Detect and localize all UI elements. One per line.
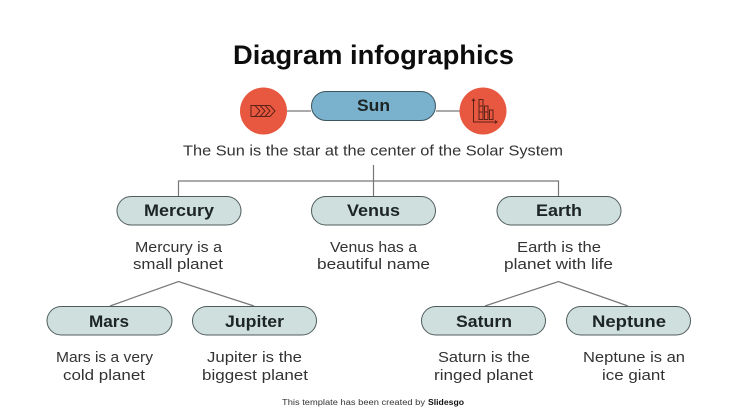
- text: Jupiter: [202, 349, 309, 384]
- pill: Venus: Venus: [347, 201, 400, 220]
- text: Neptune: [583, 349, 685, 384]
- text: Saturn: [434, 349, 534, 384]
- pill: Mercury: Mercury: [144, 201, 215, 220]
- text: Venus: Venus has a: [330, 239, 418, 256]
- pill: Earth: Earth: [536, 201, 582, 220]
- connector: Earth branch: [485, 282, 628, 306]
- footer credit: [282, 398, 464, 407]
- tree connector: [178, 165, 558, 196]
- pill: Neptune: Neptune: [592, 312, 666, 331]
- text: Jupiter: Jupiter is the: [207, 349, 302, 366]
- pill: Earth: [497, 196, 621, 225]
- pill: Saturn: [422, 306, 546, 335]
- pill: Jupiter: [192, 306, 316, 335]
- text: Jupiter: biggest planet: [202, 367, 309, 384]
- text: Earth: Earth is the: [517, 239, 601, 256]
- text: Neptune: Neptune is an: [583, 349, 685, 366]
- pill: Sun: Sun: [357, 96, 390, 115]
- text: Mars: cold planet: [63, 367, 146, 384]
- text: Venus: [317, 239, 430, 273]
- pill: Mars: Mars: [89, 312, 129, 331]
- icon: bar chart circle: [460, 88, 506, 134]
- text: Venus: beautiful name: [317, 256, 430, 273]
- pill: Saturn: Saturn: [456, 312, 512, 331]
- footer credit: Slidesgo: [428, 398, 464, 407]
- footer credit: This template has been created by: [282, 398, 425, 407]
- pill: Venus: [312, 196, 436, 225]
- text: Earth: [504, 239, 613, 273]
- icon: chevrons circle: [240, 88, 287, 134]
- connectors: sun row: [287, 110, 460, 112]
- text: Earth: planet with life: [504, 256, 613, 273]
- text: Mars: [56, 349, 154, 384]
- connector: Mercury branch: [110, 282, 254, 306]
- text: Saturn: ringed planet: [434, 367, 534, 384]
- text: Mercury: [133, 239, 224, 273]
- text: Saturn: Saturn is the: [438, 349, 530, 366]
- text: Neptune: ice giant: [602, 367, 666, 384]
- pill: Mars: [47, 306, 172, 335]
- text: Mercury: small planet: [133, 256, 224, 273]
- text: Mercury: Mercury is a: [135, 239, 223, 256]
- sun description: The Sun is the star at the center of the Solar System: [183, 142, 563, 160]
- pill: Neptune: [566, 306, 690, 335]
- text: Mars: Mars is a very: [56, 349, 154, 366]
- pill: Mercury: [117, 196, 241, 225]
- pill: Sun: [312, 92, 436, 120]
- pill: Jupiter: Jupiter: [225, 312, 284, 331]
- title: Diagram infographics: [233, 40, 514, 70]
